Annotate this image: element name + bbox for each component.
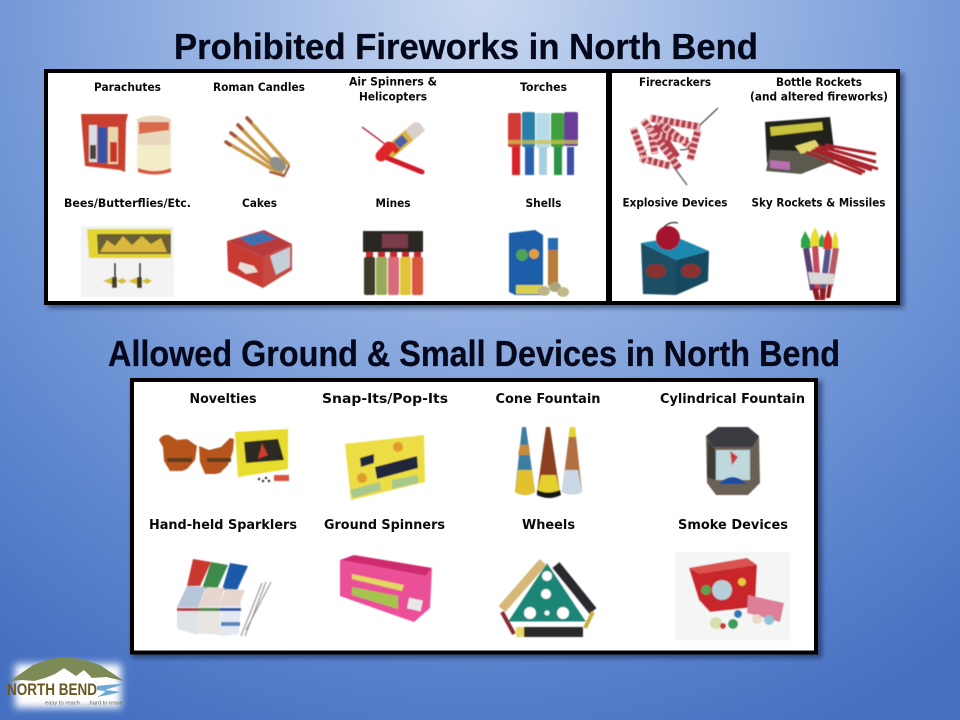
label <box>750 75 888 104</box>
icon: bees <box>81 226 174 297</box>
icon: novelties <box>159 429 289 482</box>
icon: shells <box>509 230 569 297</box>
icon: cake box <box>227 230 292 288</box>
label: Bees/Butterflies/Etc. <box>64 196 191 210</box>
label: Air Spinners & <box>349 74 437 88</box>
item: Parachutes <box>81 80 171 174</box>
item: Hand-held Sparklers <box>149 517 297 636</box>
label: Firecrackers <box>639 75 711 89</box>
label: Cone Fountain <box>496 391 600 407</box>
icon: mountains <box>10 657 124 681</box>
label: Sky Rockets & Missiles <box>752 196 886 210</box>
title: prohibited: Prohibited Fireworks in North Bend <box>174 26 758 67</box>
label: Cylindrical Fountain <box>660 391 805 407</box>
label: Bottle Rockets <box>776 75 862 89</box>
item: Cone Fountain <box>496 391 600 498</box>
icon: wheel <box>502 562 593 637</box>
icon: roman candles <box>226 118 289 176</box>
icon: pop-its <box>345 435 425 500</box>
icon: explosive device <box>641 222 709 295</box>
icon: bottle rockets <box>765 117 878 174</box>
icon: mines <box>363 231 423 295</box>
label: Cakes <box>242 196 277 210</box>
item: Cakes <box>227 196 292 288</box>
item: Novelties <box>159 391 289 482</box>
label: Parachutes <box>94 80 161 94</box>
label: Snap-Its/Pop-Its <box>322 391 448 407</box>
icon: sky rockets <box>801 227 838 300</box>
label: Roman Candles <box>213 80 305 94</box>
label: Shells <box>526 196 562 210</box>
item: Smoke Devices <box>675 517 790 640</box>
label: Mines <box>376 196 411 210</box>
icon: cylindrical fountain <box>706 427 760 495</box>
item: Air Spinners and Helicopters <box>349 74 437 172</box>
label: Explosive Devices <box>622 196 728 210</box>
icon: cone fountains <box>515 427 582 498</box>
logo wordmark: NORTH BEND <box>7 681 97 699</box>
item: Bees/Butterflies/Etc. <box>64 196 191 297</box>
label: Hand-held Sparklers <box>149 517 297 533</box>
label: (and altered fireworks) <box>750 90 888 104</box>
panel: prohibited fireworks <box>46 71 904 308</box>
item: Firecrackers <box>633 75 718 185</box>
icon: firecrackers <box>633 108 718 185</box>
item: Explosive Devices <box>622 196 728 295</box>
icon: air spinner <box>362 125 422 172</box>
label: Wheels <box>522 517 575 533</box>
item: Ground Spinners <box>324 517 445 622</box>
label: Novelties <box>190 391 256 407</box>
label: Helicopters <box>359 90 427 104</box>
item: Torches <box>508 80 578 175</box>
title: allowed: Allowed Ground & Small Devices in North Bend <box>108 333 840 374</box>
item: Sky Rockets and Missiles <box>752 196 886 300</box>
item: Bottle Rockets <box>750 75 888 174</box>
label: Torches <box>520 80 567 94</box>
logo tagline: easy to reach . . .hard to leave <box>45 700 123 706</box>
panel: allowed devices <box>132 380 822 658</box>
icon: parachutes <box>81 114 171 174</box>
item: Mines <box>363 196 423 295</box>
logo: North Bend <box>7 657 125 708</box>
icon: river <box>97 684 125 697</box>
item: Cylindrical Fountain <box>660 391 805 495</box>
icon: ground spinners box <box>340 555 432 622</box>
icon: torches <box>508 112 578 175</box>
icon: sparklers <box>177 559 271 636</box>
item: Roman Candles <box>213 80 305 176</box>
item: Snap-Its/Pop-Its <box>322 391 448 500</box>
item: Wheels <box>502 517 593 637</box>
label: Smoke Devices <box>678 517 788 533</box>
item: Shells <box>509 196 569 297</box>
label: Ground Spinners <box>324 517 445 533</box>
label <box>349 74 437 104</box>
icon: smoke devices <box>675 552 790 640</box>
